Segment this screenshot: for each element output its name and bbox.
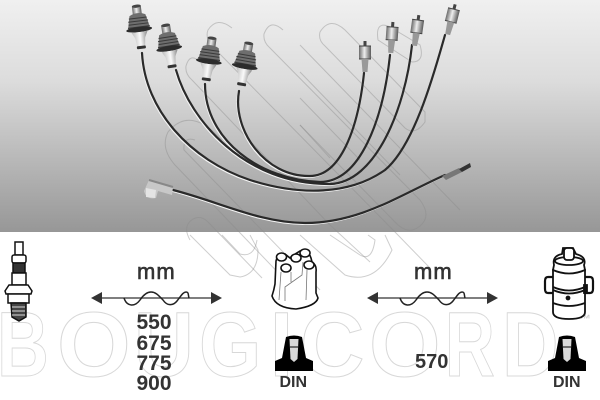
DIN label right: DIN [553, 374, 581, 391]
spark plug boot 2 [152, 22, 185, 70]
distributor terminal 4 [442, 3, 461, 36]
watermark logo: C [300, 294, 364, 396]
grey backdrop panel [0, 0, 600, 232]
dimension arrow left [91, 292, 222, 305]
distributor terminal 3 [409, 14, 425, 47]
lengths list: 900 [136, 372, 172, 395]
DIN label centre: DIN [280, 374, 307, 391]
watermark logo: G [199, 294, 261, 396]
spark plug boot 3 [193, 35, 225, 83]
watermark logo: D [502, 294, 558, 396]
icon: distributor cap [272, 249, 318, 309]
length right: 570 [415, 351, 448, 373]
distributor terminal 1 [359, 41, 371, 72]
watermark logo [0, 292, 558, 396]
icon: ignition coil [545, 248, 593, 319]
distributor terminal 2 [385, 22, 399, 53]
spark plug boot 4 [229, 40, 262, 88]
coil lead terminal [442, 163, 471, 180]
spark plug boot 1 [123, 3, 154, 50]
lengths list: 675 [136, 332, 172, 355]
icon: spark plug [5, 242, 32, 321]
mm label left: mm [137, 259, 176, 284]
lengths list: 550 [136, 311, 172, 334]
watermark logo: O [57, 292, 131, 396]
icon: DIN connector centre [275, 336, 313, 371]
watermark logo: O [369, 294, 441, 396]
mm label right: mm [414, 259, 453, 284]
dimension arrow right [367, 292, 498, 305]
trademark: ™ [579, 312, 591, 326]
watermark logo: U [134, 293, 194, 396]
wires [141, 35, 445, 224]
coil lead angled boot [144, 180, 173, 198]
watermark logo: I [270, 293, 293, 396]
wire dark cores [142, 35, 445, 223]
lengths list: 775 [136, 352, 172, 375]
watermark: rounded diagonal line pattern [165, 22, 460, 290]
wire highlights [141, 36, 444, 224]
icon: DIN connector right [548, 336, 586, 371]
watermark logo: R [445, 293, 495, 396]
lengths list [136, 311, 172, 395]
